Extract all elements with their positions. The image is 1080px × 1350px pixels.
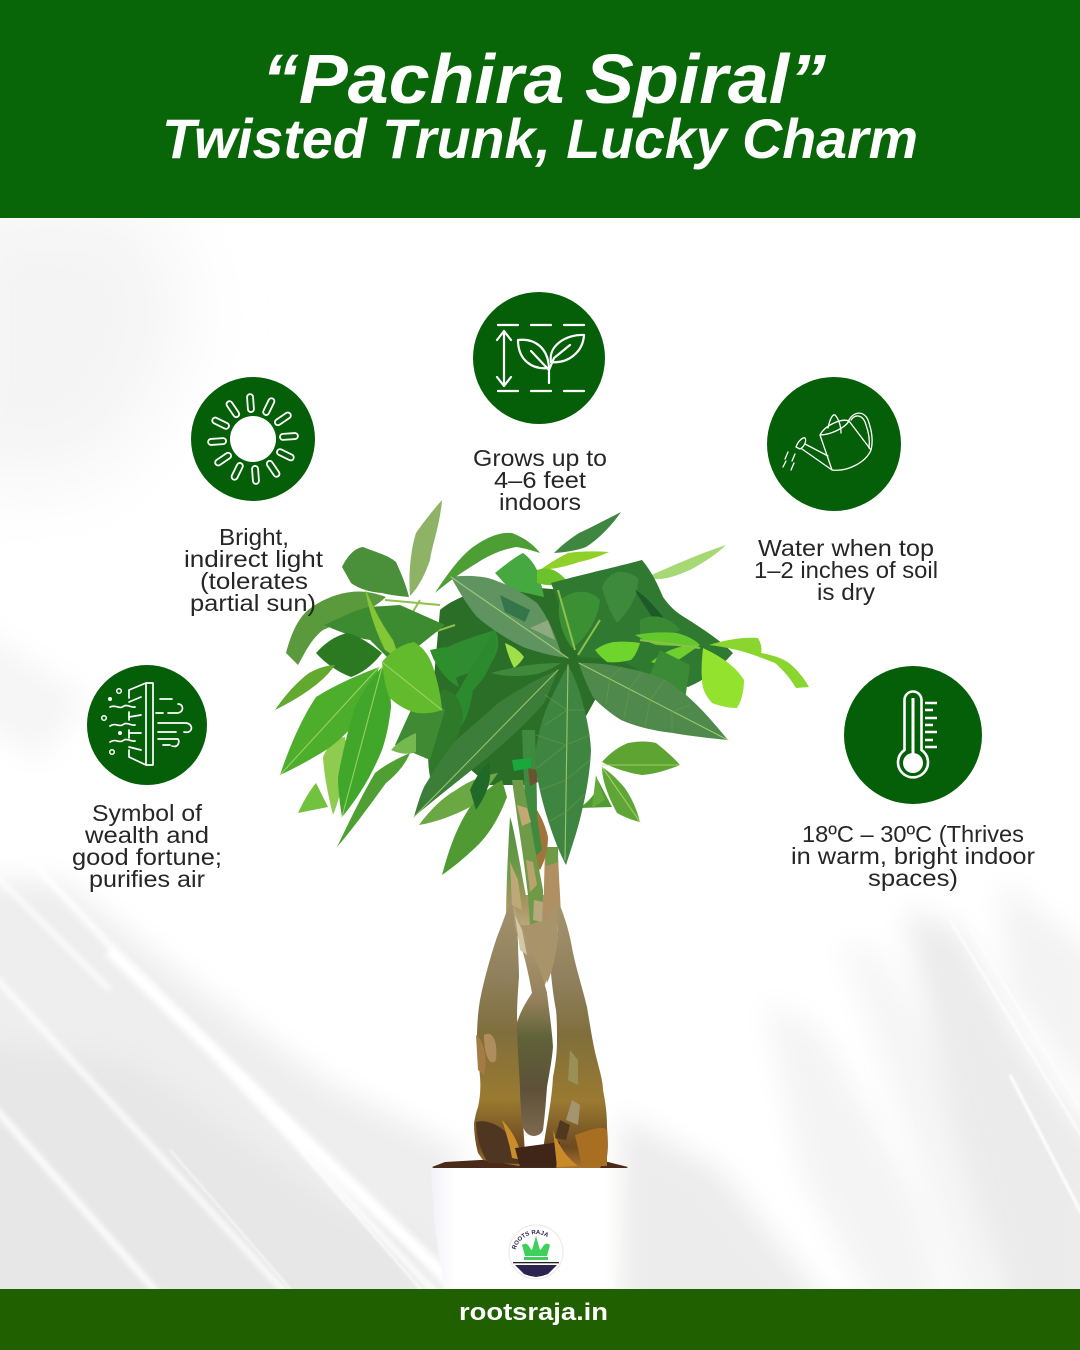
dark green strand [522,730,542,860]
brown strand [530,810,548,870]
dark hand left [324,605,445,665]
leaf: wide bright [382,642,442,713]
title [162,40,918,170]
spotted big leaf [451,576,568,658]
right upper strand [543,847,561,925]
text: light: partial sun) [190,590,316,616]
icon: sun [191,377,315,501]
big lower-left leaf [414,670,558,817]
left trunk [474,898,525,1167]
text: light: Bright, [219,524,289,550]
centre trunk [513,903,553,1136]
white pot [431,1168,628,1289]
front strand [512,780,543,925]
text: height [473,445,607,515]
right trunk [543,903,608,1168]
icon: watering can [767,377,901,511]
text: light [184,524,324,616]
stems [385,590,700,655]
footer website: rootsraja.in [459,1299,608,1326]
footer bar [0,1289,1080,1350]
title: Twisted Trunk, Lucky Charm [162,107,918,170]
text: symbolism: wealth and [84,822,209,848]
text: light: indirect light [184,546,324,572]
braided trunk [432,730,628,1169]
text: temperature: 18ºC – 30ºC (Thrives [802,821,1024,847]
leaf: left long [275,665,335,710]
back lower-left leaves [323,737,346,815]
fourth strand [538,903,558,983]
text: water: is dry [817,579,875,605]
text: light: (tolerates [200,568,308,594]
front foliage [275,576,728,865]
text: water: 1–2 inches of soil [754,557,938,583]
text: water [754,535,938,605]
pot logo [508,1224,564,1280]
text: temperature [791,821,1035,891]
leaf: left tall [338,667,391,817]
title: “Pachira Spiral” [262,40,826,118]
pot logo: ROOTS RAJA [512,1230,548,1250]
icon: air filter [87,665,207,785]
junction fill behind braid [510,895,560,985]
back foliage [286,500,809,875]
icon: thermometer [844,666,982,804]
text: height: Grows up to [473,445,607,471]
green wrap tie [512,758,531,771]
header banner [0,0,1080,218]
text: height: 4–6 feet [494,467,587,493]
plant illustration [275,500,809,1289]
text: temperature: in warm, bright indoor [791,843,1035,869]
icon: height, plant [473,292,605,424]
text: water: Water when top [758,535,934,561]
text: height: indoors [499,489,581,515]
text: temperature: spaces) [868,865,958,891]
lower-right small leaves [602,742,680,775]
big right leaf [579,663,728,740]
big centre-down leaf [535,665,591,865]
text: symbolism [72,800,222,892]
bark patches [517,805,531,826]
text: symbolism: purifies air [89,866,205,892]
left upper strand [506,817,532,925]
soil [432,1160,628,1169]
text: symbolism: Symbol of [92,800,202,826]
small bright [505,643,524,668]
text: symbolism: good fortune; [72,844,222,870]
